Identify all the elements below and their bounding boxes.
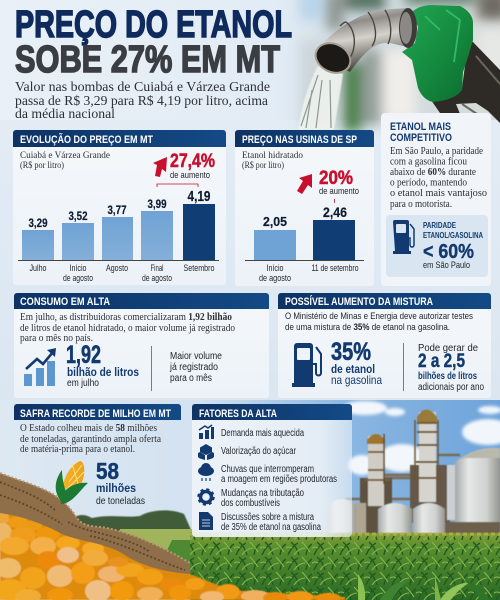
stat: 35%: na gasolina xyxy=(331,373,382,387)
background: page gradient and photo of pump xyxy=(0,0,500,405)
icon: fuel pump xyxy=(393,220,414,254)
text block: de litros de etanol hidratado, o maior volume já registrado xyxy=(20,323,235,334)
text block xyxy=(20,423,162,455)
subheading xyxy=(20,151,110,171)
icon: rising chart xyxy=(24,348,56,386)
text block: de toneladas, garantindo ampla oferta xyxy=(20,434,162,445)
bar chart: 11 de setembro xyxy=(312,263,358,274)
heading: CONSUMO EM ALTA xyxy=(20,296,110,308)
heading xyxy=(14,293,269,309)
factor text xyxy=(221,512,321,533)
stat: 2 a 2,5 bilhões: bilhões de litros xyxy=(418,371,477,382)
callout: 20%: 20% xyxy=(319,168,353,189)
text block: com a gasolina ficou xyxy=(390,156,467,168)
bar chart xyxy=(245,204,364,284)
text block: Em julho, as distribuidoras comercializaram 1,92 bilhão xyxy=(20,312,232,323)
panel: possível aumento da mistura xyxy=(278,293,491,398)
text block: abaixo de 60% durante xyxy=(390,167,477,178)
note: maior volume: Maior volume xyxy=(170,351,222,362)
stat: 35%: de etanol xyxy=(331,362,375,376)
panel: etanol mais competitivo xyxy=(381,113,491,286)
bar chart: Agosto xyxy=(106,263,128,274)
stat: 2 a 2,5 bilhões: Pode gerar de xyxy=(418,343,478,354)
callout: 20%: de aumento xyxy=(319,186,359,197)
stat: 58 milhões: 58 xyxy=(96,458,119,484)
factor text xyxy=(221,464,337,485)
refinery illustration xyxy=(327,410,500,533)
heading: EVOLUÇÃO DO PREÇO EM MT xyxy=(20,133,153,146)
callout: 20% xyxy=(319,168,359,203)
factor text: Valorização do açúcar xyxy=(221,446,297,457)
subheading xyxy=(242,151,303,171)
bar chart xyxy=(18,188,219,284)
callout: paridade: PARIDADE xyxy=(423,221,457,230)
nozzle green body xyxy=(402,5,473,102)
icon: corn cob xyxy=(56,461,88,504)
subtitle: Valor nas bombas de Cuiabá e Várzea Grande xyxy=(15,79,270,94)
text block xyxy=(20,312,235,344)
factor text: dos combustíveis xyxy=(221,498,280,509)
heading xyxy=(278,293,491,309)
text block: o etanol mais vantajoso xyxy=(390,188,487,199)
stat: 1,92 bilhão: em julho xyxy=(67,378,99,389)
heading: COMPETITIVO xyxy=(390,132,452,144)
text block: o período, mantendo xyxy=(390,178,467,188)
text block xyxy=(285,311,473,333)
callout: 27,4% xyxy=(157,151,215,187)
icon: gear xyxy=(198,490,214,504)
heading xyxy=(192,404,352,420)
heading xyxy=(13,130,226,147)
text block: de matéria-prima para o etanol. xyxy=(20,444,135,455)
subheading: (R$ por litro) xyxy=(20,160,64,171)
text block: para o mês no país. xyxy=(20,333,93,344)
burlap sack xyxy=(0,473,190,574)
callout: paridade: em São Paulo xyxy=(423,260,470,271)
heading: FATORES DA ALTA xyxy=(199,408,277,420)
panel: fatores da alta xyxy=(192,404,352,537)
bar chart: 3,29 xyxy=(28,216,48,230)
bar chart: Final xyxy=(150,263,164,274)
note: maior volume: para o mês xyxy=(170,373,212,384)
stat: 58 milhões: milhões xyxy=(96,481,136,495)
icon: red arrow xyxy=(297,174,312,194)
text block: O Estado colheu mais de 58 milhões xyxy=(20,423,157,434)
bar chart: de agosto xyxy=(259,273,291,284)
nozzle hose and trigger xyxy=(431,40,500,123)
text block xyxy=(390,146,487,210)
subtitle: passa de R$ 3,29 para R$ 4,19 por litro, acima xyxy=(15,93,268,108)
subtitle: da média nacional xyxy=(15,106,115,121)
text block: Em São Paulo, a paridade xyxy=(390,146,484,157)
heading: ETANOL MAIS xyxy=(390,121,451,133)
stat: 35% xyxy=(331,338,382,387)
panel: evolução do preço em MT xyxy=(13,130,226,285)
icon: fuel pump xyxy=(292,343,321,387)
heading: PREÇO NAS USINAS DE SP xyxy=(242,134,357,146)
text block: de uma mistura de 35% de etanol na gasolina. xyxy=(285,322,450,333)
bar chart: 2,46 xyxy=(323,204,347,220)
heading: POSSÍVEL AUMENTO DA MISTURA xyxy=(285,295,433,308)
title: PREÇO DO ETANOL xyxy=(15,4,292,46)
factor text: Mudanças na tributação xyxy=(221,488,304,499)
heading: SAFRA RECORDE DE MILHO EM MT xyxy=(20,408,171,420)
panel: consumo em alta xyxy=(14,293,269,398)
callout: paridade: < 60% xyxy=(423,241,474,263)
heading xyxy=(390,121,452,144)
callout: paridade xyxy=(386,215,488,277)
icon: rain cloud xyxy=(198,463,214,481)
icon: demand chart xyxy=(199,425,214,439)
corn leaves in field xyxy=(190,534,500,600)
heading xyxy=(14,404,181,420)
factor text: Demanda mais aquecida xyxy=(221,428,304,439)
subheading: (R$ por litro) xyxy=(242,160,284,171)
factor text: de 35% de etanol na gasolina xyxy=(221,522,321,533)
bar chart: 3,99 xyxy=(148,197,167,211)
factor text: a moagem em regiões produtoras xyxy=(221,474,337,485)
bar chart: Início xyxy=(70,263,86,274)
stat: 1,92 bilhão: bilhão de litros xyxy=(67,365,139,379)
panel: safra recorde de milho xyxy=(14,404,181,507)
note: maior volume xyxy=(169,351,222,384)
water stream xyxy=(298,66,343,130)
stat: 58 milhões: de toneladas xyxy=(96,495,145,507)
bar chart: 4,19 xyxy=(188,188,210,205)
stat: 2 a 2,5 bilhões xyxy=(418,343,484,393)
subheading: Etanol hidratado xyxy=(242,151,303,161)
stat: 2 a 2,5 bilhões: adicionais por ano xyxy=(418,382,484,393)
subheading: Cuiabá e Várzea Grande xyxy=(20,151,110,161)
background: sky, trees and corn field xyxy=(0,400,500,600)
panel: preço nas usinas de SP xyxy=(235,130,374,286)
factor text: Chuvas que interromperam xyxy=(221,464,314,475)
bar chart: 3,52 xyxy=(68,209,88,223)
callout: 27,4%: 27,4% xyxy=(170,151,215,172)
nozzle steel spout xyxy=(315,8,412,72)
bar chart: Setembro xyxy=(184,263,214,274)
bar chart: Início xyxy=(266,263,284,274)
stat: 2 a 2,5 bilhões: 2 a 2,5 xyxy=(418,351,465,372)
bar chart: 2,05 xyxy=(263,214,287,229)
bar chart: 3,77 xyxy=(108,203,127,217)
factor text xyxy=(221,488,304,509)
callout: paridade: ETANOL/GASOLINA xyxy=(423,231,483,240)
icon: red arrow xyxy=(153,157,167,177)
corn kernels xyxy=(0,510,345,600)
heading xyxy=(235,130,374,147)
title xyxy=(15,4,292,81)
note: maior volume: já registrado xyxy=(169,362,218,373)
bar chart: Julho xyxy=(30,263,46,274)
subtitle xyxy=(15,79,270,121)
stat: 35%: 35% xyxy=(331,338,371,366)
stat: 1,92 bilhão: 1,92 xyxy=(66,341,101,369)
stat: 1,92 bilhão xyxy=(66,341,139,389)
icon: document xyxy=(199,512,213,530)
bar chart: de agosto xyxy=(63,273,93,284)
bar chart: de agosto xyxy=(142,273,172,284)
photo: fuel nozzle with flowing ethanol xyxy=(298,5,500,130)
callout: 27,4%: de aumento xyxy=(170,170,210,181)
icon: sugar cubes xyxy=(198,444,214,460)
title: SOBE 27% EM MT xyxy=(15,39,280,81)
text block: para o motorista. xyxy=(390,199,452,210)
stat: 58 milhões xyxy=(96,458,145,507)
factor text: Discussões sobre a mistura xyxy=(221,512,314,523)
